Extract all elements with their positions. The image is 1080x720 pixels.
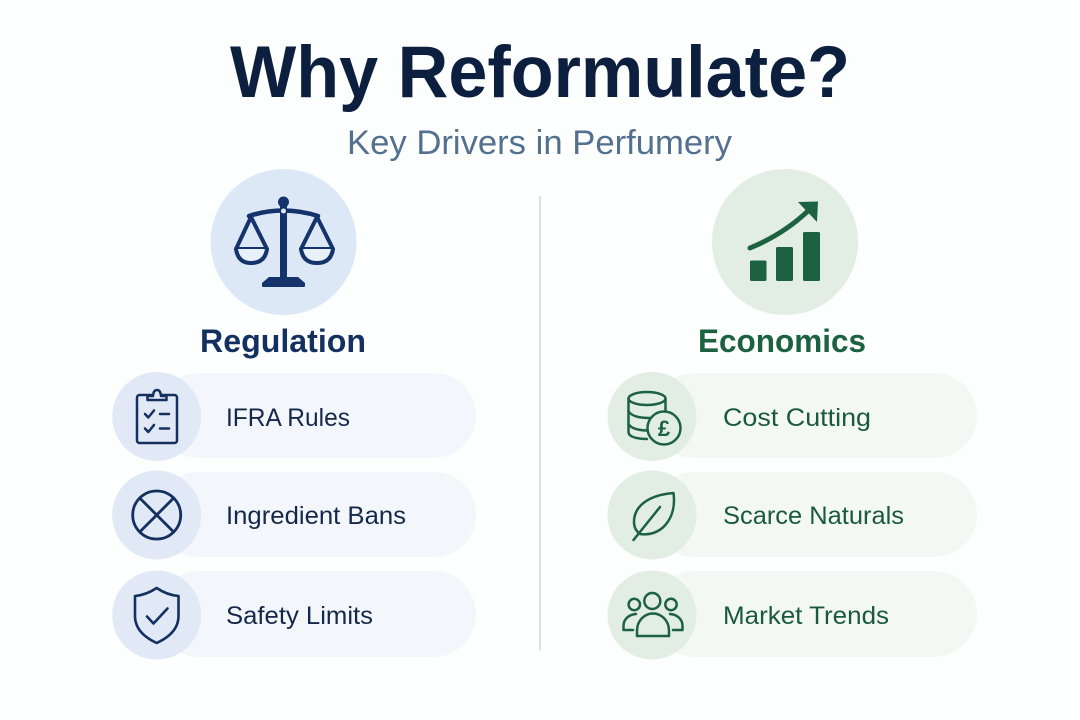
icon: leaf	[634, 493, 674, 540]
list item: Safety Limits	[112, 570, 476, 660]
subtitle: Key Drivers in Perfumery	[347, 124, 732, 162]
icon: shield check	[135, 588, 178, 643]
icon: balance scale	[210, 169, 356, 315]
label: Ingredient Bans: Ingredient Bans	[226, 502, 406, 530]
list item: IFRA Rules	[112, 372, 476, 461]
divider	[539, 196, 541, 650]
list item: Scarce Naturals	[608, 470, 977, 560]
icon: growth chart	[712, 169, 858, 315]
heading: regulation: Regulation	[200, 323, 366, 359]
icon: coins with pound	[628, 392, 680, 444]
label: Cost Cutting: Cost Cutting	[723, 404, 871, 432]
icon: clipboard checklist	[137, 390, 177, 443]
label: Scarce Naturals: Scarce Naturals	[723, 502, 904, 530]
list item: Cost Cutting	[608, 372, 977, 461]
pound sign: £	[658, 416, 671, 441]
panel: regulation	[112, 169, 476, 660]
icon: people group	[624, 593, 682, 636]
title: Why Reformulate?	[230, 32, 850, 113]
list item: Market Trends	[608, 570, 977, 660]
label: Market Trends: Market Trends	[723, 602, 889, 630]
heading: economics: Economics	[698, 323, 866, 359]
label: Safety Limits: Safety Limits	[226, 602, 373, 630]
icon: crossed circle	[133, 491, 181, 539]
list item: Ingredient Bans	[112, 470, 476, 560]
label: IFRA Rules: IFRA Rules	[226, 404, 350, 432]
panel: economics	[608, 169, 977, 660]
